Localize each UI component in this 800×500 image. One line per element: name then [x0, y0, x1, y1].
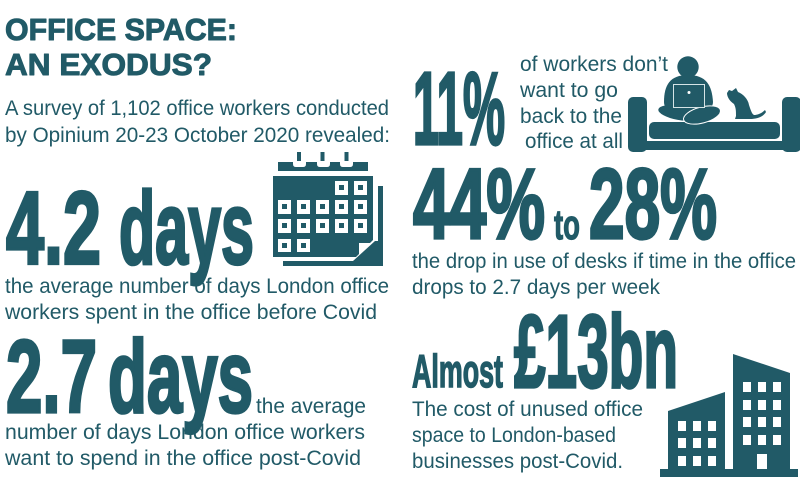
stat: 2.7 days: days [108, 319, 253, 434]
survey intro text: by Opinium 20-23 October 2020 revealed: [5, 124, 390, 147]
stat: 4.2 days: days [119, 170, 254, 286]
caption: 4.2 days: workers spent in the office before Covid [4, 301, 377, 324]
caption: desks: the drop in use of desks if time in the office [412, 250, 796, 273]
caption: desks [412, 250, 796, 299]
title [5, 12, 237, 82]
caption: 11%: office at all [525, 130, 623, 153]
survey intro text: A survey of 1,102 office workers conducted [5, 97, 389, 120]
stat: almost £13bn: Almost [412, 345, 503, 397]
caption: cost [412, 398, 643, 473]
caption: 4.2 days [4, 275, 389, 324]
caption: 11%: back to the [520, 105, 622, 128]
stat: 44% to 28%: to [554, 201, 580, 248]
stat: 4.2 days: 4.2 [6, 170, 101, 286]
stat: 44% to 28% [413, 148, 717, 259]
text: 11% [413, 51, 505, 166]
icon: person on sofa with cat [628, 56, 800, 152]
caption: 2.7 days: the average [256, 395, 366, 418]
caption: 4.2 days: the average number of days London office [5, 275, 389, 298]
stat: 44% to 28%: 28% [589, 148, 717, 259]
stat: 2.7 days [6, 319, 253, 434]
caption: 2.7 days: want to spend in the office post-Covid [4, 447, 361, 470]
stat: 44% to 28%: 44% [413, 148, 545, 259]
stat: 4.2 days [6, 170, 254, 286]
caption: desks: drops to 2.7 days per week [412, 276, 660, 299]
stat: almost £13bn [412, 294, 678, 409]
caption: cost: The cost of unused office [412, 398, 643, 421]
title: OFFICE SPACE: [5, 12, 237, 47]
survey intro text [5, 97, 390, 147]
caption: 11% [519, 53, 668, 153]
caption: 2.7 days [4, 395, 366, 470]
caption: 2.7 days: number of days London office workers [5, 421, 365, 444]
caption: cost: space to London-based [412, 424, 616, 447]
icon: office buildings [660, 354, 798, 477]
caption: cost: businesses post-Covid. [412, 450, 623, 473]
stat: 2.7 days: 2.7 [6, 319, 97, 434]
caption: 11%: of workers don’t [520, 53, 668, 76]
icon: calendar [273, 152, 383, 266]
caption: 11%: want to go [519, 79, 618, 102]
title: AN EXODUS? [5, 47, 212, 82]
